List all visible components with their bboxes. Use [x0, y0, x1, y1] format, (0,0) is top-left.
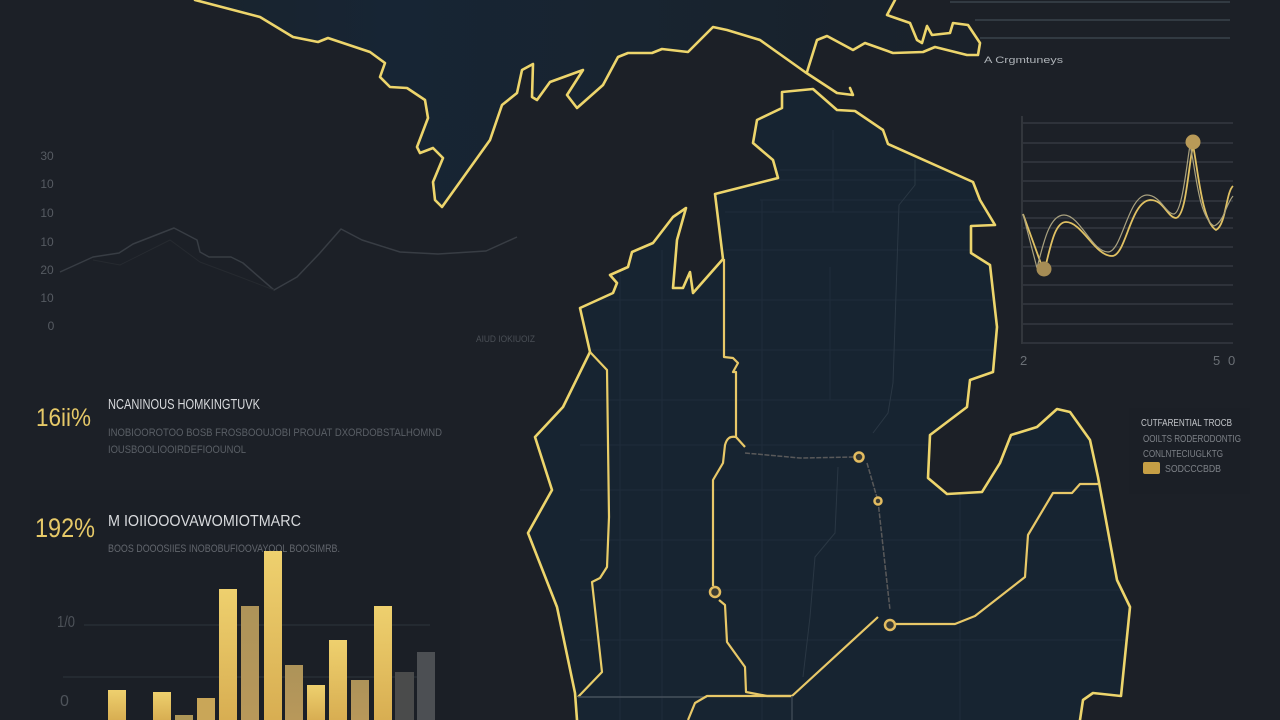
line chart: right: [1020, 116, 1235, 368]
legend badge: [1143, 462, 1160, 474]
map: south vertical line: [791, 696, 793, 720]
panel: right legend backing: [1129, 408, 1250, 494]
axis labels: 10: [40, 291, 54, 305]
legend text: OOILTS RODERODONTIG: [1143, 434, 1241, 445]
map: western county line: [578, 352, 609, 697]
map: central county line: [713, 259, 878, 696]
axis labels: 10: [40, 177, 54, 191]
peak marker: [1186, 134, 1200, 150]
map: upper peninsula water fill: [195, 0, 980, 207]
legend text: SODCCCBDB: [1165, 464, 1221, 475]
stat heading: M IOIIOOOVAWOMIOTMARC: [108, 513, 301, 530]
bars: [108, 551, 435, 720]
map: upper coastline: [195, 0, 853, 207]
grid: [1023, 123, 1233, 343]
stat description: INOBIOOROTOO BOSB FROSBOOUJOBI PROUAT DXORDOBSTALHOMND: [108, 427, 442, 439]
bar chart: [57, 551, 435, 720]
main series: [60, 228, 517, 290]
panel: bottom-left backing: [30, 490, 460, 720]
stat description: IOUSBOOLIOOIRDEFIOOUNOL: [108, 444, 246, 456]
trough marker: [1036, 262, 1052, 276]
map: faint internal grid: [580, 130, 1130, 720]
left chart caption: AIUD IOKIUOIZ: [476, 334, 535, 344]
legend text: [1143, 434, 1241, 475]
stat value: 16ii%: [36, 404, 91, 432]
map: lower peninsula fill: [528, 89, 1130, 720]
stat value: 192%: [35, 513, 95, 543]
stat 1: [36, 396, 442, 456]
x axis labels: 0: [1228, 353, 1235, 368]
stat heading: NCANINOUS HOMKINGTUVK: [108, 396, 260, 413]
top right caption: A Crgmtuneys: [984, 55, 1064, 65]
x axis labels: 2: [1020, 353, 1027, 368]
stat description: [108, 427, 442, 456]
axis labels: 10: [40, 206, 54, 220]
gold series: [1023, 145, 1233, 272]
legend text: CONLNTECIUGLKTG: [1143, 449, 1223, 460]
map: lower peninsula outline: [528, 89, 1130, 720]
pale series: [1023, 145, 1233, 268]
stat description: BOOS DOOOSIIES INOBOBUFIOOVAYOOL BOOSIMRB.: [108, 543, 340, 555]
y axis: [1021, 116, 1023, 344]
secondary series: [93, 240, 274, 290]
axis labels: 10: [40, 235, 54, 249]
map: route markers: [710, 452, 895, 630]
legend callout: [1141, 418, 1241, 475]
axis labels: 0: [48, 319, 55, 333]
line chart: left: [40, 149, 517, 333]
x axis labels: [1020, 353, 1235, 368]
x axis labels: 5: [1213, 353, 1220, 368]
map: southeast coastline: [896, 484, 1098, 624]
axis labels: 20: [40, 263, 54, 277]
axis labels: 1/0: [57, 614, 75, 631]
stat 2: [35, 513, 340, 555]
map: south border: [578, 696, 707, 698]
map: southern gold border: [688, 696, 792, 720]
bar chart: 0: [60, 693, 69, 710]
top right lines: [950, 2, 1230, 38]
grid lines: [63, 625, 430, 677]
map: eastern upper coastline: [807, 0, 980, 72]
axis labels: 30: [40, 149, 54, 163]
legend title: CUTFARENTIAL TROCB: [1141, 418, 1232, 429]
axis labels: [40, 149, 55, 333]
map: dashed route: [745, 453, 890, 610]
